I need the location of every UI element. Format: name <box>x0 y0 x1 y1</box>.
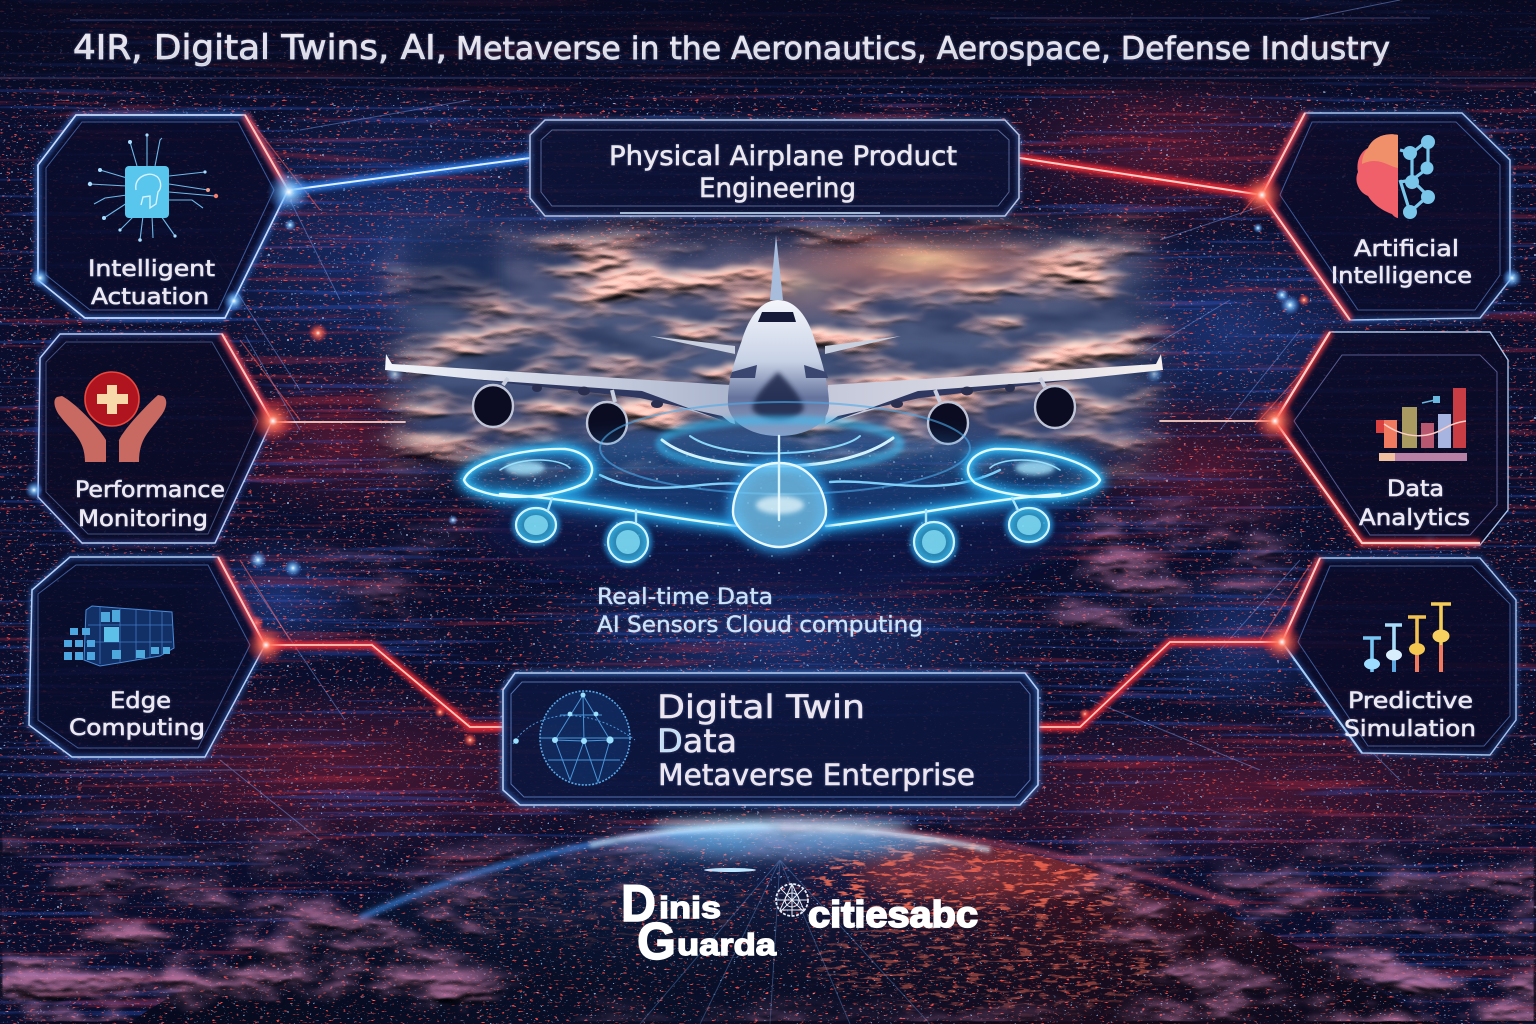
label: Data Analytics <box>1359 477 1470 531</box>
bright light sparks <box>248 219 1438 747</box>
label: Predictive Simulation <box>1344 689 1476 742</box>
panel: Physical Airplane Product Engineering <box>530 120 1019 216</box>
hologram: engines <box>516 498 1049 562</box>
airplane: fuselage <box>728 300 829 436</box>
airplane: cockpit windows <box>758 312 796 322</box>
label: Predictive Simulation: Simulation <box>1344 717 1476 742</box>
lower cloud layer <box>0 790 1536 1024</box>
hologram glow field <box>460 430 1100 530</box>
icon: hands holding medical cross <box>54 372 166 462</box>
digital twin hologram <box>460 402 1100 595</box>
label: Edge Computing <box>69 689 205 741</box>
side cloud banks <box>310 477 1299 644</box>
icon: predictive simulation sliders <box>1363 604 1451 672</box>
logo text: citiesabc: citiesabc <box>808 894 978 935</box>
planet atmosphere rim <box>360 817 1240 918</box>
panel: Edge Computing <box>29 557 286 757</box>
central cloudy sky behind airplane <box>371 207 1178 488</box>
airplane: horizontal stabilizers <box>650 336 901 354</box>
logo icon: network sphere <box>776 884 808 916</box>
text: Digital Twin Data Metaverse Enterprise <box>657 688 975 792</box>
logo: Dinis Guarda: D <box>621 875 656 933</box>
logo: citiesabc <box>776 884 978 935</box>
hologram: fuselage globe <box>733 436 826 547</box>
airplane <box>385 235 1163 444</box>
real-time data caption: Real-time Data <box>597 585 773 610</box>
hologram particle dust <box>490 445 1070 575</box>
airplane: tail fin <box>770 235 783 300</box>
heading: Physical Airplane Product Engineering <box>609 141 957 204</box>
panel: Data Analytics <box>1253 332 1508 545</box>
real-time data caption: AI Sensors Cloud computing <box>597 613 923 638</box>
label: Data Analytics: Data <box>1387 477 1444 502</box>
title: Metaverse in the Aeronautics, Aerospace, Defense Industry <box>456 31 1390 67</box>
panel: Performance Monitoring <box>25 334 295 543</box>
label: Edge Computing: Edge <box>110 689 171 714</box>
label: Intelligent Actuation: Intelligent <box>88 257 215 282</box>
logo: Dinis Guarda: uarda <box>677 927 777 962</box>
title <box>73 28 1390 68</box>
hologram: wing outline and loops <box>464 449 1100 526</box>
heading: Physical Airplane Product Engineering: Physical Airplane Product <box>609 141 957 172</box>
label: Edge Computing: Computing <box>69 716 205 741</box>
logo: Dinis Guarda: G <box>637 913 676 971</box>
real-time data caption <box>597 585 923 638</box>
airplane: nose shading <box>752 372 804 420</box>
label: Performance Monitoring: Performance <box>75 478 225 503</box>
logo: Dinis Guarda <box>621 875 777 971</box>
panel: Intelligent Actuation <box>30 115 311 318</box>
connector: Intelligent Actuation to Physical Airplane <box>290 158 530 190</box>
panel: Predictive Simulation <box>1262 558 1516 755</box>
connector: Predictive Simulation to Digital Twin <box>1040 642 1282 727</box>
hologram: sonar rings <box>600 402 1000 494</box>
panel: Artificial Intelligence <box>1240 113 1522 320</box>
title: 4IR, Digital Twins, AI, <box>73 28 447 68</box>
label: Performance Monitoring <box>75 478 225 532</box>
icon: bar chart with trend line <box>1376 388 1467 461</box>
heading: Physical Airplane Product Engineering: Engineering <box>699 173 856 204</box>
planet horizon <box>127 820 1433 1024</box>
airplane: side window bands <box>730 365 828 378</box>
text: Digital Twin Data Metaverse Enterprise: Digital Twin <box>657 688 865 726</box>
icon: AI chip with circuit traces <box>88 133 218 242</box>
icon: wireframe digital globe <box>513 691 635 785</box>
connector: Performance Monitoring <box>272 418 405 426</box>
airplane: right wing <box>825 354 1163 424</box>
icon: edge computing server block <box>64 606 174 666</box>
text: Digital Twin Data Metaverse Enterprise: Data <box>657 722 737 760</box>
connector: Artificial Intelligence to Physical Airplane <box>1020 158 1262 195</box>
panel: Digital Twin Data Metaverse Enterprise <box>503 673 1038 805</box>
label: Intelligent Actuation <box>88 257 215 310</box>
label: Data Analytics: Analytics <box>1359 506 1470 531</box>
label: Intelligent Actuation: Actuation <box>91 285 209 310</box>
connector: Edge Computing to Digital Twin <box>265 645 503 727</box>
label: Artificial Intelligence: Intelligence <box>1331 264 1472 289</box>
label: Predictive Simulation: Predictive <box>1348 689 1473 714</box>
label: Performance Monitoring: Monitoring <box>78 507 208 532</box>
airplane: engines <box>473 378 1075 444</box>
connector lines <box>265 158 1282 727</box>
text: Digital Twin Data Metaverse Enterprise: Metaverse Enterprise <box>658 758 975 792</box>
hologram dark backdrop <box>480 465 1080 595</box>
label: Artificial Intelligence <box>1331 237 1472 289</box>
logo: Dinis Guarda: inis <box>659 890 721 925</box>
connector: Data Analytics <box>1160 417 1275 425</box>
label: Artificial Intelligence: Artificial <box>1354 237 1459 262</box>
icon: half brain half network <box>1356 134 1435 219</box>
airplane: left wing <box>385 354 735 424</box>
airplane: wing undersides <box>470 379 1080 424</box>
